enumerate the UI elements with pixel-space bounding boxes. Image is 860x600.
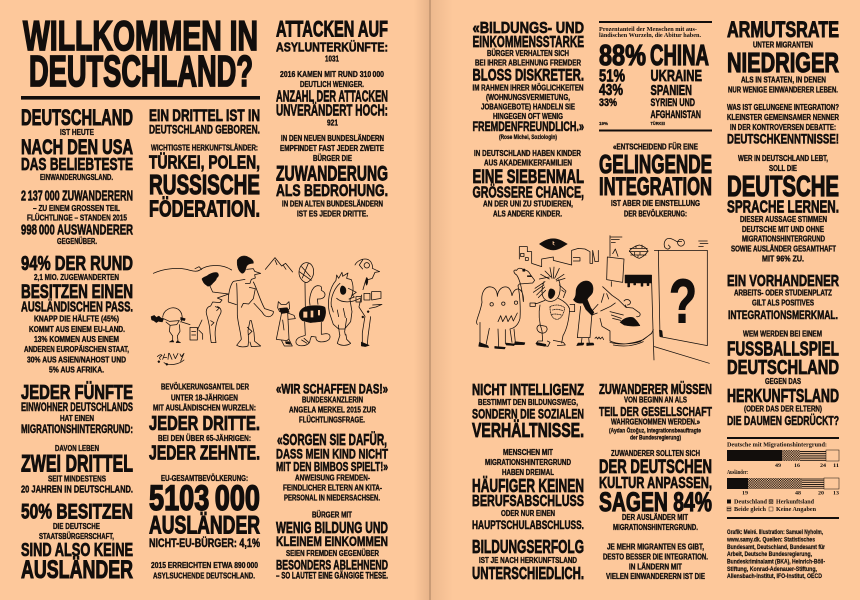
text block: Attacken auf Asylunterkünfte: IN DEN NEUEN BUNDESLÄNDERN	[281, 133, 384, 143]
text block: Attacken auf Asylunterkünfte	[276, 16, 388, 218]
credits: Bundesamt, Deutschland, Bundesamt für	[727, 544, 825, 551]
text block: Berufsabschluss: BERUFSABSCHLUSS	[472, 493, 584, 510]
chart: Abitur percentage table: UKRAINE	[650, 68, 702, 85]
text block: Attacken auf Asylunterkünfte: EMPFINDET FAST JEDER ZWEITE	[280, 143, 384, 153]
text block: gelingende Integration: «ENTSCHEIDEND FÜR EINE	[613, 142, 698, 152]
chart: Abitur percentage table: AFGHANISTAN	[650, 109, 701, 121]
icon: flag and picture	[607, 236, 624, 286]
text block: ausländischer Pass: BESITZEN EINEN	[21, 281, 133, 303]
figure: skeletal creature in shoe	[600, 287, 653, 346]
text block: ausländischer Pass	[21, 253, 133, 374]
title: WILLKOMMEN IN	[23, 12, 258, 59]
figure: camel	[477, 268, 535, 349]
text block: Akademikerfamilien	[472, 148, 584, 218]
chart: Abitur percentage table: 19%	[599, 121, 608, 126]
big number: 5103000 Ausländer: 5103 000	[149, 479, 260, 518]
text block: Kultur anpassen: DER AUSLÄNDER MIT	[622, 512, 688, 522]
text block: Migrationshintergrund	[21, 381, 133, 496]
icon: black eye	[539, 239, 567, 250]
text block: Deutschkenntnisse	[727, 102, 840, 264]
text block: Kultur anpassen: DER DEUTSCHEN	[599, 456, 712, 478]
figure: naked man	[228, 256, 273, 347]
text block: ausländischer Pass: 30% AUS ASIEN/NAHOST UND	[27, 354, 126, 364]
chart: Abitur percentage table: 43%	[599, 82, 623, 99]
text block: Integrationsmerkmal: GILT ALS POSITIVES	[752, 298, 814, 308]
text block: jeder dritte: MIT AUSLÄNDISCHEN WURZELN:	[153, 402, 256, 412]
text block: Kultur anpassen: KULTUR ANPASSEN,	[599, 475, 712, 492]
text block: beliebtestes Einwanderungsland: NACH DEN USA	[21, 136, 133, 159]
quote: Bildungsstarke Bürger: HINGEGEN OFT WENIG	[493, 111, 563, 121]
text block: Migrationshintergrund: 20 JAHREN IN DEUTSCHLAND.	[21, 484, 133, 496]
bar: Ausländer: Ausländer:	[727, 469, 748, 476]
text block: Deutschkenntnisse: MIGRATIONSHINTERGRUND	[742, 234, 825, 244]
bar: Deutsche mit Migrationshintergrund: 24	[820, 463, 826, 469]
credits	[726, 529, 825, 580]
text block: Deutschkenntnisse: DEUTSCHE MIT UND OHNE	[742, 224, 824, 234]
text block: Bildung und Einkommen: SEIEN FREMDEN GEGENÜBER	[286, 548, 380, 558]
icon: brick ball	[629, 245, 648, 258]
quote: Bildungsstarke Bürger: EINKOMMENSSTARKE	[472, 34, 584, 51]
chart: Abitur percentage table: 51%	[599, 66, 625, 86]
figure: woman with black hair	[573, 281, 604, 346]
text block: ausländischer Pass: 2,1 MIO. ZUGEWANDERTEN	[34, 272, 119, 282]
text block: deutsche Staatsbürgerschaft: STAATSBÜRGERSCHAFT,	[39, 531, 114, 541]
quote: Teil der Gesellschaft: VON BEGINN AN ALS	[624, 394, 687, 404]
text block: Attacken auf Asylunterkünfte: 1031	[325, 54, 339, 64]
quote: Bildungsstarke Bürger: BEI IHRER ABLEHNUNG FREMDER	[475, 58, 582, 68]
legend: Herkunftsland	[776, 498, 814, 506]
big number: 5103000 Ausländer	[149, 473, 260, 580]
illustration: camel, figures and door with question mark	[477, 236, 709, 363]
text block: Fussballspiel: GEGEN DAS	[765, 376, 801, 386]
text block: ausländischer Pass: 94% DER RUND	[21, 253, 133, 275]
text block: beliebtestes Einwanderungsland: 998 000 AUSWANDERER	[21, 222, 133, 238]
title	[21, 12, 260, 100]
quotes block: ANGELA MERKEL 2015 ZUR	[289, 404, 377, 414]
quote: Bildungsstarke Bürger: (Rose Michel, Soziologin)	[499, 134, 557, 141]
text block: Herkunftsländer: DEUTSCHLAND GEBOREN.	[149, 122, 260, 136]
text block: Herkunftsländer: FÖDERATION.	[149, 196, 260, 222]
legend: Keine Angaben	[776, 506, 816, 513]
text block: Armutsrate: ALS IN STAATEN, IN DENEN	[741, 74, 826, 84]
figure: hairy creature	[328, 272, 360, 345]
text block: Bildungserfolg: IST JE NACH HERKUNFTSLAND	[479, 555, 577, 565]
text block: Kultur anpassen: ZUWANDERER SOLLTEN SICH	[611, 448, 700, 458]
text block: soziale Verhältnisse: NICHT INTELLIGENZ	[472, 382, 584, 399]
quotes block: PERSONAL IN NIEDERSACHSEN.	[284, 492, 380, 502]
text block: Akademikerfamilien: AN DER UNI ZU STUDIEREN,	[483, 198, 573, 208]
text block: Deutschkenntnisse: MIT 96% ZU.	[762, 254, 804, 264]
illustration: group of caricature figures	[151, 256, 382, 365]
text block: je mehr Migranten: IN LÄNDERN MIT	[629, 562, 683, 572]
text block: je mehr Migranten: JE MEHR MIGRANTEN ES GIBT,	[607, 542, 704, 552]
text block: Bildung und Einkommen	[276, 510, 388, 580]
quote: Bildungsstarke Bürger: BÜRGER VERHALTEN SICH	[487, 48, 569, 58]
text block: Attacken auf Asylunterkünfte: UNVERÄNDERT HOCH:	[276, 102, 388, 120]
credits: www.samy.dk. Quellen: Statistisches	[726, 536, 815, 544]
text block: gelingende Integration: DER BEVÖLKERUNG:	[624, 208, 687, 218]
text block: Bildung und Einkommen: WENIG BILDUNG UND	[276, 520, 388, 537]
text block: deutsche Staatsbürgerschaft: SIND ALSO KEINE	[21, 540, 133, 560]
quotes block: FEINDLICHER ELTERN AN KITA-	[283, 482, 382, 492]
text block: Berufsabschluss: MENSCHEN MIT	[503, 447, 554, 457]
icon: dripping black wall	[625, 275, 652, 287]
text block: Berufsabschluss: HABEN DREIMAL	[502, 467, 554, 477]
text block: soziale Verhältnisse: BESTIMMT DEN BILDUNGSWEG,	[478, 397, 578, 407]
big number: 5103000 Ausländer: 2015 ERREICHTEN ETWA 890 000	[151, 560, 258, 570]
text block: gelingende Integration: IST ABER DIE EINSTELLUNG	[611, 198, 700, 208]
text block: Integrationsmerkmal	[727, 273, 839, 322]
quote: Bildungsstarke Bürger: IM RAHMEN IHRER MÖGLICHKEITEN	[472, 82, 584, 92]
text block: deutsche Staatsbürgerschaft: AUSLÄNDER	[21, 556, 133, 584]
text block: Akademikerfamilien: GRÖSSERE CHANCE,	[472, 182, 584, 202]
figure: cat in dress	[276, 302, 295, 346]
bar: Ausländer: 19	[742, 490, 748, 496]
text block: Berufsabschluss	[472, 447, 584, 532]
chart: Abitur percentage table: ländischen Wurzeln, die Abitur haben.	[599, 32, 701, 39]
chart: Abitur percentage table: CHINA	[650, 40, 709, 72]
door with question mark: ?	[669, 267, 697, 336]
text block: jeder dritte: UNTER 18-JÄHRIGEN	[171, 392, 238, 402]
quotes block: «SORGEN SIE DAFÜR,	[277, 432, 387, 449]
text block: jeder dritte: JEDER DRITTE.	[149, 413, 260, 435]
text block: Migrationshintergrund: EINWOHNER DEUTSCHLANDS	[21, 401, 133, 414]
text block: Armutsrate: UNTER MIGRANTEN	[753, 40, 813, 50]
text block: Attacken auf Asylunterkünfte: 2016 KAMEN MIT RUND 310 000	[280, 69, 384, 79]
quote: Bildungsstarke Bürger: (WOHNUNGSVERMIETUNG,	[486, 92, 570, 102]
quotes block: ANWEISUNG FREMDEN-	[295, 472, 370, 482]
quote: Bildungsstarke Bürger: «BILDUNGS- UND	[472, 20, 584, 37]
text block: Akademikerfamilien: EINE SIEBENMAL	[472, 166, 584, 188]
quote: Bildungsstarke Bürger	[472, 20, 584, 141]
bar: Ausländer	[727, 469, 839, 496]
chart: Abitur percentage table: 33%	[599, 97, 617, 109]
text block: soziale Verhältnisse	[472, 382, 584, 442]
text block: jeder dritte	[149, 382, 260, 464]
text block: gelingende Integration	[599, 142, 712, 218]
quotes block: FLÜCHTLINGSFRAGE.	[299, 414, 365, 424]
bar: Deutsche mit Migrationshintergrund: 49	[775, 463, 781, 469]
text block: deutsche Staatsbürgerschaft: DIE DEUTSCHE	[53, 521, 100, 531]
text block: jeder dritte: BEVÖLKERUNGSANTEIL DER	[161, 382, 250, 392]
chart: Abitur percentage table	[599, 21, 712, 132]
text block: beliebtestes Einwanderungsland: IST HEUTE	[60, 127, 94, 137]
quote: Bildungsstarke Bürger: JOBANGEBOTE) HANDELN SIE	[481, 102, 575, 112]
quotes block: BUNDESKANZLERIN	[302, 394, 363, 404]
text block: jeder dritte: BEI DEN ÜBER 65-JÄHRIGEN:	[158, 433, 251, 443]
text block: Deutschkenntnisse: SOLL DIE	[769, 163, 797, 173]
text block: Kultur anpassen: MIGRATIONSHINTERGRUND.	[613, 522, 698, 532]
big number: 5103000 Ausländer: ASYLSUCHENDE DEUTSCHLAND.	[153, 570, 255, 580]
text block: soziale Verhältnisse: SONDERN DIE SOZIALEN	[472, 406, 584, 422]
text block: soziale Verhältnisse: VERHÄLTNISSE.	[472, 419, 584, 442]
figure: balloon and big-nose character	[296, 263, 330, 346]
bar: Ausländer: 13	[833, 490, 839, 496]
text block: Attacken auf Asylunterkünfte: DEUTLICH WENIGER.	[300, 79, 364, 89]
credits: Grafik: Meiré. Illustration: Samuel Nyholm,	[727, 529, 823, 536]
text block: jeder dritte: JEDER ZEHNTE.	[149, 442, 260, 464]
text block: Attacken auf Asylunterkünfte: ALS BEDROHUNG.	[276, 181, 388, 200]
text block: Berufsabschluss: HÄUFIGER KEINEN	[472, 476, 584, 497]
bar: Deutsche mit Migrationshintergrund	[727, 442, 839, 469]
text block: Bildung und Einkommen: BESONDERS ABLEHNEND	[276, 558, 388, 572]
text block: beliebtestes Einwanderungsland: 2 137 000 ZUWANDERERN	[21, 188, 133, 204]
text block: Berufsabschluss: ODER NUR EINEN	[501, 508, 555, 518]
title: DEUTSCHLAND?	[29, 48, 253, 96]
text block: Bildungserfolg: UNTERSCHIEDLICH.	[472, 563, 584, 583]
text block: Akademikerfamilien: AUS AKADEMIKERFAMILIEN	[484, 158, 572, 168]
credits: Stiftung, Konrad-Adenauer-Stiftung,	[727, 566, 817, 573]
text block: ausländischer Pass: AUSLÄNDISCHEN PASS.	[21, 298, 133, 316]
text block: ausländischer Pass: 5% AUS AFRIKA.	[49, 364, 104, 374]
text block: Akademikerfamilien: ALS ANDERE KINDER.	[493, 208, 562, 218]
text block: Bildung und Einkommen: BÜRGER MIT	[312, 510, 352, 520]
quote: Teil der Gesellschaft: (Aydan Özoğuz, Integrationsbeauftragte	[609, 428, 702, 434]
chart: Abitur percentage table: SPANIEN	[650, 83, 692, 99]
text block: deutsche Staatsbürgerschaft	[21, 500, 133, 584]
text block: Attacken auf Asylunterkünfte: BÜRGER DIE	[313, 153, 352, 163]
text block: beliebtestes Einwanderungsland: GEGENÜBER.	[57, 236, 97, 246]
text block: ausländischer Pass: KNAPP DIE HÄLFTE (45%)	[34, 314, 119, 324]
quotes block: «WIR SCHAFFEN DAS!»	[276, 382, 388, 396]
stacked bar chart: Daumen gedrückt	[727, 437, 839, 519]
text block: je mehr Migranten: DESTO BESSER DIE INTEGRATION.	[603, 552, 708, 562]
big number: 5103000 Ausländer: EU-GESAMTBEVÖLKERUNG:	[161, 473, 248, 483]
text block: beliebtestes Einwanderungsland: FLÜCHTLINGE – STANDEN 2015	[27, 212, 127, 222]
text block: Fussballspiel: WEM WERDEN BEI EINEM	[743, 328, 822, 338]
text block: Herkunftsländer: WICHTIGSTE HERKUNFTSLÄNDER:	[151, 142, 258, 152]
credits: Bundeskriminalamt (BKA), Heinrich-Böll-	[727, 558, 825, 566]
figure: small bald figure with braid	[151, 308, 203, 343]
text block: beliebtestes Einwanderungsland: DAS BELIEBTESTE	[21, 154, 133, 174]
text block: Attacken auf Asylunterkünfte: IST ES JEDER DRITTE.	[297, 208, 368, 218]
text block: je mehr Migranten	[603, 542, 708, 581]
quotes block: MIT DEN BIMBOS SPIELT!»	[276, 459, 388, 474]
text block: Herkunftsländer: TÜRKEI, POLEN,	[149, 152, 260, 174]
bar: Deutsche mit Migrationshintergrund: Deutsche mit Migrationshintergrund:	[727, 442, 827, 448]
text block: je mehr Migranten: VIELEN EINWANDERERN IST DIE	[606, 571, 705, 581]
quote: Bildungsstarke Bürger: BLOSS DISKRETER.	[472, 66, 584, 84]
quote: Teil der Gesellschaft: TEIL DER GESELLSCHAFT	[599, 404, 712, 419]
text block: ausländischer Pass: 13% KOMMEN AUS EINEM	[34, 334, 119, 344]
text block: gelingende Integration: INTEGRATION	[599, 174, 712, 201]
text block: Berufsabschluss: HAUPTSCHULABSCHLUSS.	[472, 519, 584, 532]
text block: Bildung und Einkommen: – SO LAUTET EINE GÄNGIGE THESE.	[276, 570, 388, 580]
text block: Fussballspiel: (ODER DAS DER ELTERN)	[744, 404, 822, 414]
text block: Akademikerfamilien: IN DEUTSCHLAND HABEN KINDER	[474, 148, 582, 158]
text block: beliebtestes Einwanderungsland: DEUTSCHLAND	[21, 105, 133, 130]
text block: Attacken auf Asylunterkünfte: ANZAHL DER ATTACKEN	[276, 88, 388, 106]
text block: beliebtestes Einwanderungsland: – ZU EINEM GROSSEN TEIL	[33, 203, 121, 213]
legend: Deutschland	[734, 498, 767, 506]
figure: tall figure with glasses	[355, 259, 382, 347]
quote: Teil der Gesellschaft	[599, 381, 712, 442]
quotes block	[276, 382, 388, 502]
text block: Attacken auf Asylunterkünfte: IN DEN ALTEN BUNDESLÄNDERN	[282, 198, 383, 208]
text block: Attacken auf Asylunterkünfte: ATTACKEN AUF	[276, 16, 388, 42]
text block: Bildungserfolg	[472, 537, 584, 583]
quote: Teil der Gesellschaft: der Bundesregierung)	[630, 436, 681, 442]
quote: Teil der Gesellschaft: WAHRGENOMMEN WERDEN.»	[611, 416, 700, 426]
text block: Attacken auf Asylunterkünfte: 921	[327, 118, 338, 128]
big number: 5103000 Ausländer: NICHT-EU-BÜRGER: 4,1%	[149, 537, 260, 550]
text block: Migrationshintergrund: ZWEI DRITTEL	[21, 450, 133, 478]
text block: deutsche Staatsbürgerschaft: 50% BESITZEN	[21, 500, 133, 524]
text block: gelingende Integration: GELINGENDE	[599, 149, 712, 179]
legend	[727, 498, 816, 513]
text block: Deutschkenntnisse: DIESER AUSSAGE STIMMEN	[740, 214, 827, 224]
signature	[157, 353, 184, 365]
text block: Berufsabschluss: MIGRATIONSHINTERGRUND	[485, 457, 571, 467]
credits: Allensbach-Institut, IFO-Institut, OECD	[727, 573, 822, 580]
text block: Attacken auf Asylunterkünfte: ZUWANDERUNG	[276, 162, 388, 186]
quote: Bildungsstarke Bürger: FREMDENFREUNDLICH.»	[472, 119, 584, 134]
text block: Kultur anpassen: SAGEN 84%	[599, 487, 712, 517]
figure: lion-maned character	[530, 267, 575, 346]
chart: Abitur percentage table: 88%	[599, 40, 646, 72]
icon: hook lamp and squiggle	[664, 238, 708, 249]
text block: beliebtestes Einwanderungsland	[21, 105, 133, 246]
chart: Abitur percentage table: SYRIEN UND	[650, 97, 695, 109]
chart: Abitur percentage table: Prozentanteil der Menschen mit aus-	[599, 26, 697, 33]
text block: Bildung und Einkommen: KLEINEM EINKOMMEN	[276, 534, 388, 549]
text block: Bildungserfolg: BILDUNGSERFOLG	[472, 537, 584, 557]
text block: Migrationshintergrund: MIGRATIONSHINTERGRUND:	[21, 423, 133, 436]
big number: 5103000 Ausländer: AUSLÄNDER	[149, 512, 260, 540]
legend: Beide gleich	[734, 506, 766, 513]
text block: Herkunftsländer: RUSSISCHE	[149, 169, 260, 200]
text block: Migrationshintergrund: JEDER FÜNFTE	[21, 381, 133, 404]
chart: Abitur percentage table: TÜRKEI	[650, 120, 665, 126]
text block: Migrationshintergrund: SEIT MINDESTENS	[48, 474, 106, 484]
bar: Deutsche mit Migrationshintergrund: 16	[794, 463, 800, 469]
text block: Attacken auf Asylunterkünfte: ASYLUNTERKÜNFTE:	[276, 40, 388, 54]
figure: curly hair thin figure	[202, 272, 229, 343]
text block: Fussballspiel	[727, 328, 839, 428]
text block: ausländischer Pass: ANDEREN EUROPÄISCHEN STAAT,	[24, 344, 129, 354]
credits: Arbeit, Deutsche Bundesregierung,	[727, 551, 812, 558]
bar: Ausländer: 20	[818, 490, 824, 496]
quotes block: DASS MEIN KIND NICHT	[276, 446, 388, 462]
quote: Teil der Gesellschaft: ZUWANDERER MÜSSEN	[599, 381, 712, 398]
text block: Herkunftsländer: EIN DRITTEL IST IN	[149, 106, 260, 125]
right part of illustration: flag, picture, door, question mark, creature	[600, 236, 709, 363]
bar: Ausländer: 48	[795, 490, 801, 496]
bar: Deutsche mit Migrationshintergrund: 11	[833, 463, 839, 469]
text block: Herkunftsländer	[149, 106, 260, 222]
text block: Kultur anpassen	[599, 448, 712, 532]
text block: ausländischer Pass: KOMMT AUS EINEM EU-LAND.	[29, 324, 125, 334]
text block: Migrationshintergrund: DAVON LEBEN	[55, 443, 99, 453]
text block: Armutsrate	[727, 17, 839, 94]
text block: Migrationshintergrund: HAT EINEN	[60, 413, 94, 423]
text block: beliebtestes Einwanderungsland: EINWANDERUNGSLAND.	[40, 172, 113, 182]
left part of illustration: eye, skyline, camel, lion, woman	[477, 239, 604, 349]
